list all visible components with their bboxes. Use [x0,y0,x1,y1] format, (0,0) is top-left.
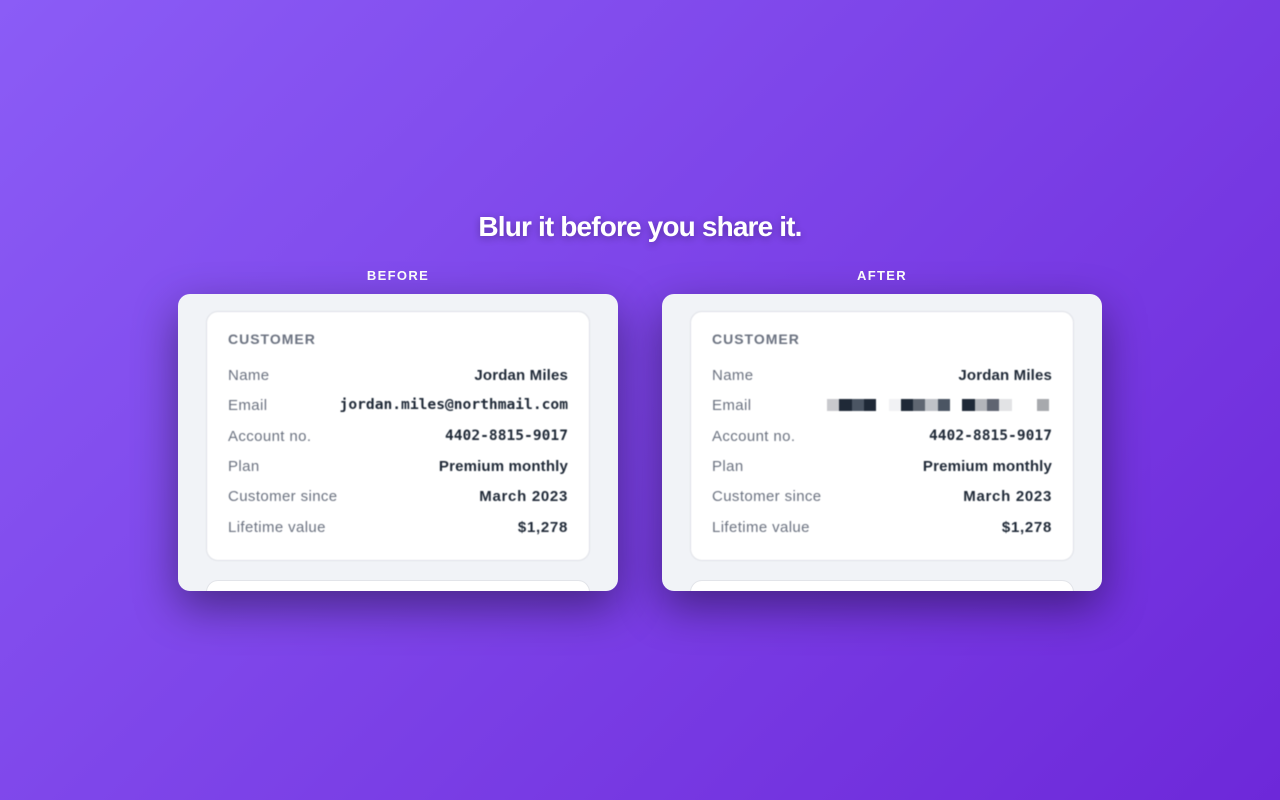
after label: AFTER [857,268,907,283]
card heading: CUSTOMER [712,331,800,347]
row: account number: 4402-8815-9017 [929,427,1052,444]
row: customer since: March 2023 [963,488,1052,505]
row: customer since: Customer since [712,488,822,505]
panel: before screenshot [178,294,618,591]
row: name [228,367,568,384]
row: lifetime value: $1,278 [518,519,568,536]
row: customer since: Customer since [228,488,338,505]
before label: BEFORE [367,268,429,283]
row: lifetime value [228,519,568,536]
row: plan [228,458,568,475]
row: name: Name [228,367,270,384]
customer card [690,311,1074,561]
row: plan: Premium monthly [439,458,568,475]
row: email [228,396,568,414]
row: name: Jordan Miles [958,367,1052,384]
row: lifetime value [712,519,1052,536]
next card, cropped [690,580,1074,642]
row: plan: Plan [712,458,744,475]
row: plan: Plan [228,458,260,475]
row: name: Jordan Miles [474,367,568,384]
row: name: Name [712,367,754,384]
customer card [206,311,590,561]
row: email label: Email [712,397,751,414]
row: plan: Premium monthly [923,458,1052,475]
row: email: Email [228,397,267,414]
title: Blur it before you share it. [478,211,802,242]
before panel shadow [178,294,618,591]
row: account number: Account no. [712,428,795,445]
row: account number [228,427,568,445]
row: customer since: March 2023 [479,488,568,505]
row: customer since [228,488,568,505]
row: account number: Account no. [228,428,311,445]
row: name [712,367,1052,384]
row: account number [712,427,1052,445]
row: lifetime value: Lifetime value [712,519,810,536]
row: lifetime value: $1,278 [1002,519,1052,536]
row: account number: 4402-8815-9017 [445,427,568,444]
after panel shadow [662,294,1102,591]
next card, cropped [206,580,590,642]
row: email: jordan.miles@northmail.com [340,396,568,413]
row: customer since [712,488,1052,505]
row: plan [712,458,1052,475]
pixelated email [826,398,1050,412]
panel: after screenshot [662,294,1102,591]
row: lifetime value: Lifetime value [228,519,326,536]
card heading: CUSTOMER [228,331,316,347]
